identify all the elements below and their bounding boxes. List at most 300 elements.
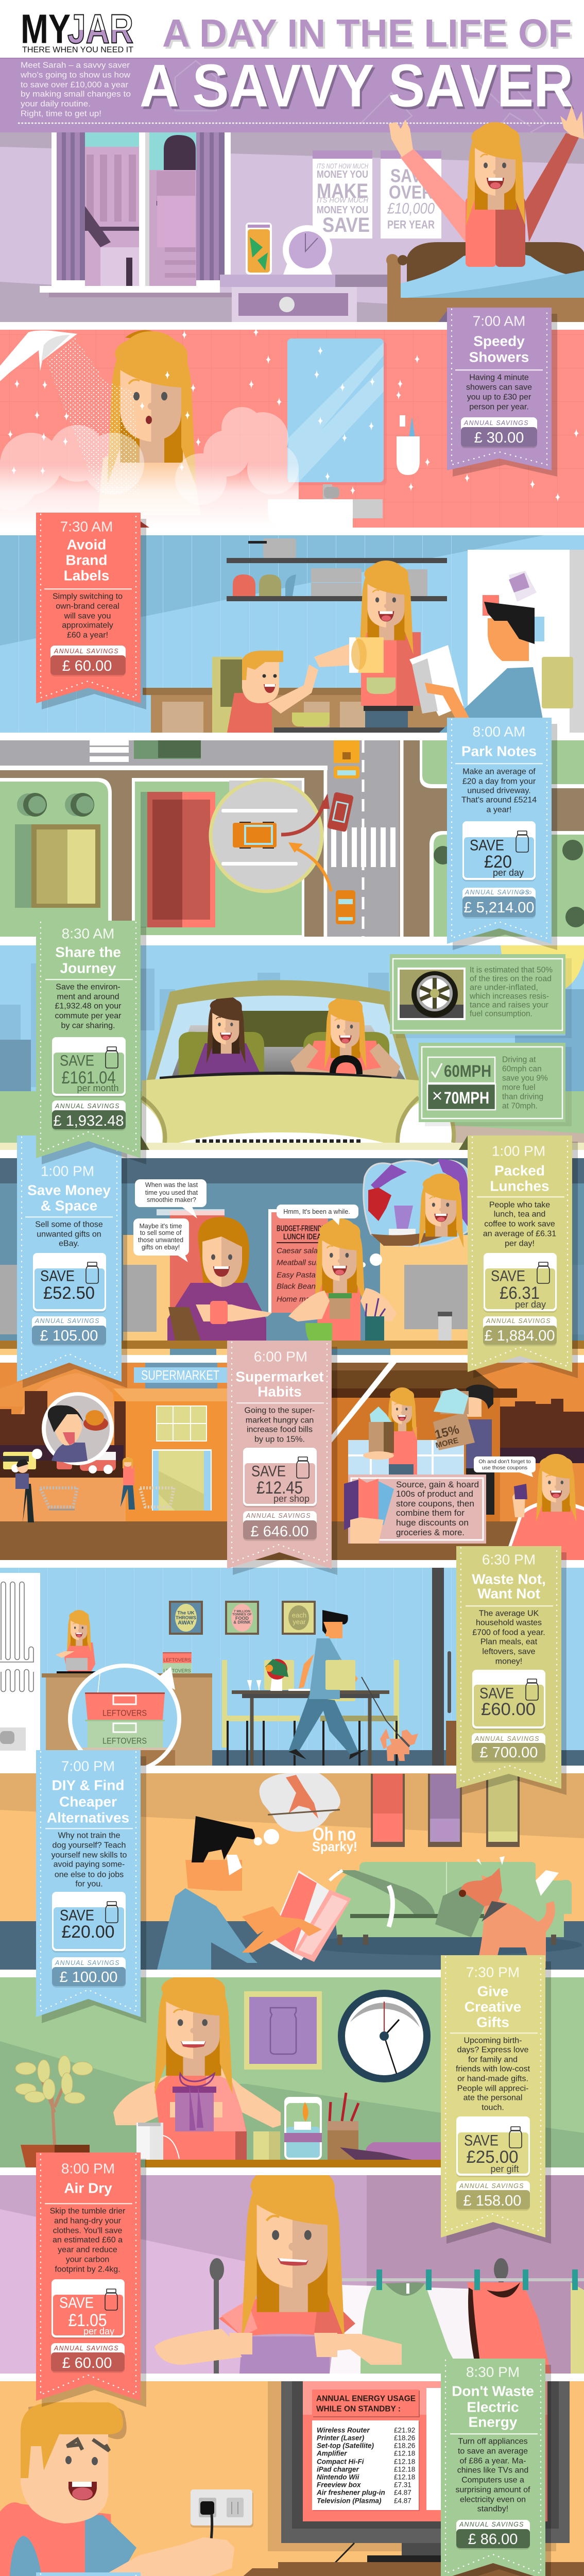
wall frames: food waste fact: 7 MILLION bbox=[234, 1609, 250, 1614]
body: household wastes bbox=[476, 1619, 542, 1627]
body: standby! bbox=[477, 2505, 508, 2513]
lunch ideas board: Meatball sub bbox=[277, 1258, 320, 1267]
energy usage table: Printer (Laser) bbox=[317, 2434, 365, 2442]
red building bbox=[141, 792, 215, 927]
time: 7:00 PM bbox=[61, 1758, 115, 1774]
panel: bedroom scene bbox=[0, 106, 584, 322]
heading: Electric bbox=[467, 2399, 519, 2415]
annual savings: ANNUAL SAVINGS bbox=[55, 1959, 120, 1967]
panel: kitchen scene bbox=[0, 535, 584, 733]
intro text: Right, time to get up! bbox=[21, 109, 101, 118]
save box: SAVE bbox=[251, 1463, 286, 1480]
heading: Waste Not, bbox=[472, 1571, 546, 1587]
save box: £20 bbox=[484, 852, 512, 872]
annual savings: £ 30.00 bbox=[474, 430, 524, 446]
body: touch. bbox=[482, 2103, 504, 2112]
vehicles bbox=[3, 1452, 116, 1474]
posters on the wall: ITS NOT HOW MUCH bbox=[317, 162, 369, 170]
posters on the wall: £10,000 bbox=[387, 200, 435, 217]
body bbox=[456, 2437, 530, 2513]
white shelf divider 10 bbox=[0, 2167, 584, 2175]
logo: MyJar header: MY bbox=[21, 6, 71, 52]
annual savings bbox=[51, 2343, 125, 2373]
caption: oh no sparky: Sparky! bbox=[312, 1839, 357, 1854]
body: increase food bills bbox=[247, 1425, 313, 1434]
speech bubble: sell gifts: gifts on ebay! bbox=[142, 1244, 180, 1251]
caption: oh no sparky bbox=[312, 1824, 357, 1854]
time: 6:00 PM bbox=[254, 1349, 307, 1364]
body: dog yourself? Teach bbox=[53, 1841, 126, 1850]
Sarah eating bbox=[288, 1218, 397, 1341]
body: year and reduce bbox=[58, 2245, 117, 2255]
body: will save you bbox=[64, 612, 111, 620]
body: Simply switching to bbox=[53, 592, 123, 601]
heading: Park Notes bbox=[461, 743, 537, 759]
speech bubble: been a while: Hmm, It's been a while. bbox=[283, 1208, 350, 1215]
annual savings: ANNUAL SAVINGS bbox=[459, 2521, 524, 2528]
heading: Creative bbox=[465, 1999, 521, 2014]
speech bubble: smoothie maker: When was the last bbox=[145, 1181, 198, 1189]
info box: speed: 70MPH bbox=[444, 1089, 489, 1107]
save box: per day bbox=[83, 2326, 114, 2336]
info box: tyres: which increases resis- bbox=[469, 992, 549, 1001]
body bbox=[55, 983, 122, 1030]
info box: speed: save you 9% bbox=[502, 1074, 548, 1083]
car bonnet bbox=[142, 1075, 454, 1143]
orange car parked bbox=[233, 822, 277, 849]
wall frames: food waste fact: year bbox=[293, 1618, 306, 1626]
heading: Habits bbox=[257, 1384, 302, 1399]
ribbon: air dry bbox=[36, 2153, 146, 2407]
dog bbox=[380, 1728, 418, 1761]
energy usage table: Air freshener plug-in bbox=[316, 2488, 385, 2497]
speech bubble: sell gifts: to sell some of bbox=[140, 1229, 182, 1236]
annual savings: £ 86.00 bbox=[468, 2531, 518, 2548]
annual savings: £ 1,884.00 bbox=[484, 1328, 555, 1344]
energy usage table: £12.18 bbox=[394, 2458, 415, 2466]
body: by car sharing. bbox=[61, 1021, 115, 1030]
body: for you. bbox=[75, 1879, 103, 1889]
heading: Journey bbox=[60, 960, 116, 976]
body: ment and around bbox=[57, 992, 119, 1002]
annual savings bbox=[243, 1511, 317, 1541]
zebra crossings bbox=[90, 740, 396, 867]
body: That's around £5214 bbox=[461, 795, 537, 805]
wall frames: food waste fact: AWAY bbox=[178, 1620, 194, 1626]
kitchen island: LEFTOVERS bbox=[163, 1657, 191, 1663]
body: Why not train the bbox=[58, 1831, 121, 1840]
arrow out bbox=[281, 801, 324, 835]
coupon info box: groceries & more. bbox=[396, 1528, 465, 1537]
annual savings bbox=[456, 2181, 530, 2211]
body: days? Express love bbox=[457, 2045, 528, 2055]
callout: leftovers magnifier: LEFTOVERS bbox=[102, 1708, 147, 1718]
info box: speed: 60MPH bbox=[444, 1062, 491, 1080]
panel: living room scene bbox=[0, 1773, 584, 1970]
body: ate the personal bbox=[463, 2094, 522, 2102]
coupon info box bbox=[344, 1475, 486, 1544]
Sarah wrapping gift bbox=[113, 1971, 281, 2131]
lunch ideas board: LUNCH IDEAS bbox=[283, 1232, 325, 1242]
Sarah with laundry bbox=[154, 2160, 402, 2374]
speech bubble: sell gifts: Maybe it's time bbox=[140, 1223, 182, 1230]
city skyline bbox=[0, 963, 584, 1091]
ribbon: park notes bbox=[447, 718, 557, 950]
save box: £6.31 bbox=[500, 1283, 540, 1303]
body bbox=[51, 1831, 127, 1889]
save box bbox=[243, 1448, 317, 1507]
wall frames: food waste fact: & DRINK bbox=[233, 1620, 251, 1625]
body: Save the environ- bbox=[56, 983, 121, 991]
logo: MyJar header bbox=[21, 6, 133, 55]
fridge and radiator bbox=[0, 1573, 40, 1766]
save box: per gift bbox=[490, 2164, 519, 2174]
speech bubble: smoothie maker: time you used that bbox=[145, 1189, 198, 1196]
annual savings: £ 646.00 bbox=[251, 1523, 308, 1540]
body: £60 a year! bbox=[67, 631, 108, 640]
panel: air dry scene bbox=[0, 2160, 584, 2374]
body: Skip the tumble drier bbox=[50, 2207, 126, 2215]
energy usage table: Amplifier bbox=[316, 2449, 347, 2458]
ribbon: speedy showers bbox=[438, 308, 557, 477]
body bbox=[50, 2207, 126, 2274]
heading bbox=[27, 1182, 111, 1214]
save box: £60.00 bbox=[481, 1700, 536, 1719]
posters on the wall: SAVE bbox=[390, 165, 432, 187]
body: People who take bbox=[489, 1200, 550, 1210]
body: of £86 a year. Ma- bbox=[460, 2456, 526, 2466]
intro text: your daily routine. bbox=[21, 100, 91, 108]
save box bbox=[484, 1253, 557, 1313]
heading: & Space bbox=[41, 1197, 97, 1214]
man walking dog bbox=[288, 1610, 402, 1759]
television bbox=[268, 2381, 570, 2563]
logo: MyJar header: JAR bbox=[67, 6, 133, 52]
fridge with notes bbox=[468, 550, 584, 733]
save box bbox=[462, 821, 536, 882]
speech bubble: sell gifts bbox=[133, 1218, 189, 1262]
save box: £25.00 bbox=[467, 2147, 518, 2167]
heading: Share the bbox=[55, 944, 121, 960]
panel: creative gifts scene bbox=[0, 1971, 584, 2167]
heading: Showers bbox=[469, 349, 529, 365]
body: friends with low-cost bbox=[456, 2065, 530, 2073]
heading: Want Not bbox=[477, 1586, 540, 1601]
sparkles bbox=[8, 328, 579, 502]
ribbon: supermarket habits bbox=[227, 1341, 337, 1575]
energy usage table: £12.18 bbox=[394, 2473, 415, 2481]
trees bbox=[17, 793, 584, 927]
cars on road bbox=[134, 740, 359, 929]
body: Make an average of bbox=[462, 768, 536, 776]
side table with jar and clock bbox=[220, 223, 387, 322]
time: 1:00 PM bbox=[492, 1143, 545, 1159]
body: surprising amount of bbox=[456, 2485, 530, 2495]
heading: Gifts bbox=[476, 2014, 509, 2030]
annual savings bbox=[483, 1316, 557, 1346]
potted plant bbox=[15, 2056, 93, 2167]
info box: speed: 60mph can bbox=[502, 1064, 542, 1074]
annual savings: ANNUAL SAVINGS bbox=[246, 1512, 311, 1519]
posters on the wall bbox=[313, 150, 441, 239]
body: avoid paying some- bbox=[54, 1860, 125, 1869]
energy usage table: Set-top (Satellite) bbox=[317, 2442, 374, 2449]
energy usage table: £4.87 bbox=[394, 2488, 411, 2497]
body: your carbon bbox=[66, 2256, 109, 2264]
coupon info box: combine them for bbox=[396, 1509, 465, 1518]
body: Sell some of those bbox=[35, 1220, 103, 1229]
ribbon: delete your cards bbox=[36, 2572, 146, 2576]
posters on the wall: SAVE bbox=[322, 214, 370, 236]
save box: SAVE bbox=[40, 1267, 75, 1285]
thought cloud: dog trainer bbox=[254, 1773, 340, 1845]
panel: supermarket scene bbox=[0, 1363, 584, 1560]
energy usage table bbox=[312, 2389, 420, 2511]
annual savings: ANNUAL SAVINGS bbox=[486, 1317, 551, 1325]
body: a year! bbox=[487, 806, 511, 814]
annual savings: £ 1,932.48 bbox=[53, 1113, 124, 1129]
heading bbox=[64, 537, 109, 583]
window with city view bbox=[40, 132, 232, 297]
save box: SAVE bbox=[60, 1052, 94, 1070]
body: person per year. bbox=[469, 403, 529, 411]
speech bubble: smoothie maker bbox=[135, 1179, 207, 1218]
shower head and water bbox=[0, 330, 121, 474]
posters on the wall: MONEY YOU bbox=[317, 205, 368, 216]
Sarah waking up bbox=[389, 106, 584, 267]
panel: shower scene bbox=[0, 328, 584, 528]
body: and hang-dry your bbox=[54, 2216, 122, 2226]
sun bbox=[501, 945, 584, 994]
annual savings: ANNUAL SAVINGS bbox=[463, 419, 529, 427]
heading bbox=[472, 1571, 546, 1601]
save box: per shop bbox=[273, 1494, 310, 1504]
pavement and ground bbox=[0, 1478, 227, 1521]
callout: leftovers magnifier bbox=[70, 1666, 179, 1772]
save box: £20.00 bbox=[62, 1922, 114, 1942]
heading: Save Money bbox=[27, 1182, 111, 1198]
energy usage table: Compact Hi-Fi bbox=[317, 2458, 364, 2466]
energy usage table: Television (Plasma) bbox=[317, 2497, 382, 2505]
man with 15% more bag: 15% bbox=[433, 1422, 461, 1442]
save box: SAVE bbox=[491, 1267, 525, 1285]
annual savings: £ 105.00 bbox=[40, 1328, 98, 1344]
desk objects bbox=[305, 1298, 452, 1341]
save box: SAVE bbox=[470, 837, 504, 854]
annual savings: ANNUAL SAVINGS bbox=[459, 2182, 524, 2190]
body: per day! bbox=[505, 1240, 535, 1248]
lunch ideas board: Easy Pasta Salad bbox=[277, 1270, 338, 1280]
save box bbox=[472, 1670, 545, 1730]
info box: speed: than driving bbox=[502, 1092, 543, 1101]
body: for family and bbox=[468, 2056, 518, 2064]
annual savings: £ 158.00 bbox=[463, 2193, 521, 2209]
info box: speed: at 70mph. bbox=[502, 1101, 538, 1111]
info box: tyres: It is estimated that 50% bbox=[470, 965, 553, 975]
ribbon: share the journey bbox=[36, 921, 149, 1164]
annual savings bbox=[32, 1316, 106, 1346]
save box bbox=[33, 1253, 106, 1313]
title line 1: A DAY IN THE LIFE OF bbox=[164, 13, 574, 58]
body: coffee to work save bbox=[484, 1220, 555, 1228]
save box bbox=[52, 1037, 126, 1097]
energy usage table: iPad charger bbox=[317, 2466, 359, 2473]
wall frames: food waste fact: The UK bbox=[177, 1611, 195, 1616]
wall paintings bbox=[371, 1774, 520, 1847]
time: 8:00 PM bbox=[61, 2161, 115, 2176]
shelves with pots and mugs bbox=[227, 538, 447, 601]
body bbox=[456, 2036, 530, 2112]
body: eBay. bbox=[59, 1240, 79, 1248]
store building bbox=[113, 1363, 227, 1521]
annual savings: ANNUAL SAVINGS bbox=[54, 2345, 119, 2352]
hungry man portrait bbox=[42, 1392, 114, 1465]
white shelf divider 2 bbox=[0, 528, 584, 535]
ribbon: waste not want not bbox=[456, 1546, 566, 1795]
energy usage table: £12.18 bbox=[394, 2466, 415, 2473]
heading: Air Dry bbox=[64, 2180, 112, 2196]
energy usage table: £18.26 bbox=[394, 2442, 415, 2449]
panel: dining room scene bbox=[0, 1568, 584, 1772]
heading: Speedy bbox=[473, 333, 525, 349]
info box: tyres: tance and raises your bbox=[470, 1001, 548, 1010]
wall frames: food waste fact: FOOD bbox=[235, 1616, 249, 1621]
washing line bbox=[210, 2258, 584, 2374]
body: chines like TVs and bbox=[457, 2466, 528, 2475]
intro text: who's going to show us how bbox=[20, 71, 131, 79]
save box: SAVE bbox=[60, 1907, 94, 1924]
body: £1,932.48 on your bbox=[55, 1002, 122, 1011]
body: unused driveway. bbox=[467, 786, 531, 795]
annual savings bbox=[461, 417, 537, 448]
heading: Alternatives bbox=[47, 1809, 129, 1826]
white shelf divider 3 bbox=[0, 733, 584, 740]
man reading newspaper bbox=[409, 602, 573, 733]
heading: Cheaper bbox=[59, 1794, 117, 1809]
energy usage table: £4.87 bbox=[394, 2497, 411, 2505]
body: showers can save bbox=[466, 383, 532, 392]
save box: £12.45 bbox=[256, 1478, 303, 1498]
lunch ideas board bbox=[268, 1209, 341, 1313]
heading bbox=[452, 2383, 534, 2430]
kitchen island bbox=[42, 1652, 212, 1766]
Sarah pouring juice bbox=[314, 561, 421, 727]
info box: speed: more fuel bbox=[502, 1083, 536, 1092]
info box: speed: Driving at bbox=[502, 1055, 536, 1064]
body: approximately bbox=[62, 621, 113, 630]
body: Plan meals, eat bbox=[480, 1637, 538, 1647]
annual savings: ANNUAL SAVINGS bbox=[55, 1103, 120, 1110]
body bbox=[472, 1609, 545, 1666]
body: by up to 15%. bbox=[254, 1435, 305, 1444]
body: market hungry can bbox=[246, 1416, 314, 1425]
time: 7:00 AM bbox=[473, 313, 525, 329]
wall frames: food waste fact: THROWS bbox=[176, 1615, 196, 1620]
body: Going to the super- bbox=[245, 1406, 315, 1415]
time: 8:30 AM bbox=[62, 925, 114, 942]
white shelf divider 6 bbox=[0, 1355, 584, 1363]
energy usage table: £12.18 bbox=[394, 2449, 415, 2458]
Sarah with trolley bbox=[121, 1458, 174, 1510]
annual savings: UP TO bbox=[519, 890, 531, 895]
panel: road map scene bbox=[0, 740, 584, 937]
annual savings bbox=[456, 2520, 530, 2550]
save box: per month bbox=[77, 1083, 119, 1093]
body bbox=[461, 768, 537, 814]
time: 8:00 AM bbox=[473, 723, 525, 740]
man reading magazine bbox=[157, 1816, 351, 1970]
save box: SAVE bbox=[479, 1685, 514, 1702]
heading: Avoid bbox=[67, 537, 106, 552]
body: Upcoming birth- bbox=[464, 2036, 522, 2045]
driveway magnifier bbox=[211, 780, 331, 891]
lunch ideas board: Caesar salad bbox=[277, 1247, 322, 1255]
white shelf divider 11 bbox=[0, 2374, 584, 2381]
body: unwanted gifts on bbox=[37, 1230, 101, 1239]
posters on the wall: PER YEAR bbox=[387, 218, 435, 231]
speech bubble: been a while bbox=[277, 1205, 358, 1225]
body bbox=[245, 1406, 315, 1444]
speech bubble: coupons: use those coupons bbox=[482, 1465, 527, 1471]
annual savings bbox=[462, 888, 536, 919]
energy usage table: Freeview box bbox=[317, 2481, 361, 2488]
Sarah with shopping bag bbox=[363, 1387, 417, 1484]
energy usage table: Wireless Router bbox=[317, 2427, 370, 2434]
bed bbox=[386, 242, 584, 322]
heading bbox=[490, 1162, 549, 1194]
energy usage table: £18.26 bbox=[394, 2434, 415, 2442]
annual savings: £ 60.00 bbox=[62, 2355, 112, 2371]
body: one else to do jobs bbox=[55, 1870, 124, 1879]
Sarah holding coupons bbox=[504, 1454, 584, 1560]
hanging clothes bbox=[330, 2269, 584, 2374]
supermarket sign: SUPERMARKET bbox=[141, 1367, 219, 1383]
body: you up to £30 per bbox=[467, 393, 531, 402]
body: £20 a day from your bbox=[462, 777, 536, 786]
ribbon: packed lunches bbox=[459, 1136, 578, 1378]
speech bubble: coupons: Oh and don't forget to bbox=[478, 1459, 531, 1465]
body: £700 of food a year. bbox=[472, 1628, 545, 1637]
body bbox=[53, 592, 123, 640]
time: 7:30 AM bbox=[60, 518, 113, 535]
torn green sofa bbox=[330, 1856, 572, 1945]
panel: office scene bbox=[0, 1158, 584, 1355]
heading: Lunches bbox=[490, 1178, 549, 1194]
gift table items bbox=[136, 2093, 441, 2167]
body: Computers use a bbox=[461, 2476, 524, 2484]
annual savings: £ 5,214.00 bbox=[463, 900, 535, 916]
Sarah in shower bbox=[67, 330, 201, 515]
heading bbox=[47, 1777, 129, 1826]
body: commute per year bbox=[55, 1012, 122, 1020]
coupon info box: huge discounts on bbox=[396, 1518, 469, 1528]
body: to save an average bbox=[458, 2447, 528, 2455]
dining table and chairs bbox=[222, 1659, 399, 1766]
boy at table bbox=[212, 651, 330, 733]
info box: tyres: are under-inflated, bbox=[470, 983, 538, 992]
annual savings: £ 700.00 bbox=[480, 1744, 538, 1761]
lunch ideas board: Home made bbox=[277, 1295, 319, 1303]
lawns bbox=[0, 740, 584, 937]
white shelf divider 8 bbox=[0, 1766, 584, 1773]
framed jar art bbox=[244, 1991, 322, 2070]
white shelf divider 1 bbox=[0, 322, 584, 330]
heading: Packed bbox=[494, 1162, 545, 1179]
coupon info box: 100s of product and bbox=[396, 1489, 473, 1499]
posters on the wall: MAKE bbox=[317, 180, 368, 202]
road strip bbox=[0, 1461, 124, 1478]
body: or hand-made gifts. bbox=[457, 2074, 528, 2083]
